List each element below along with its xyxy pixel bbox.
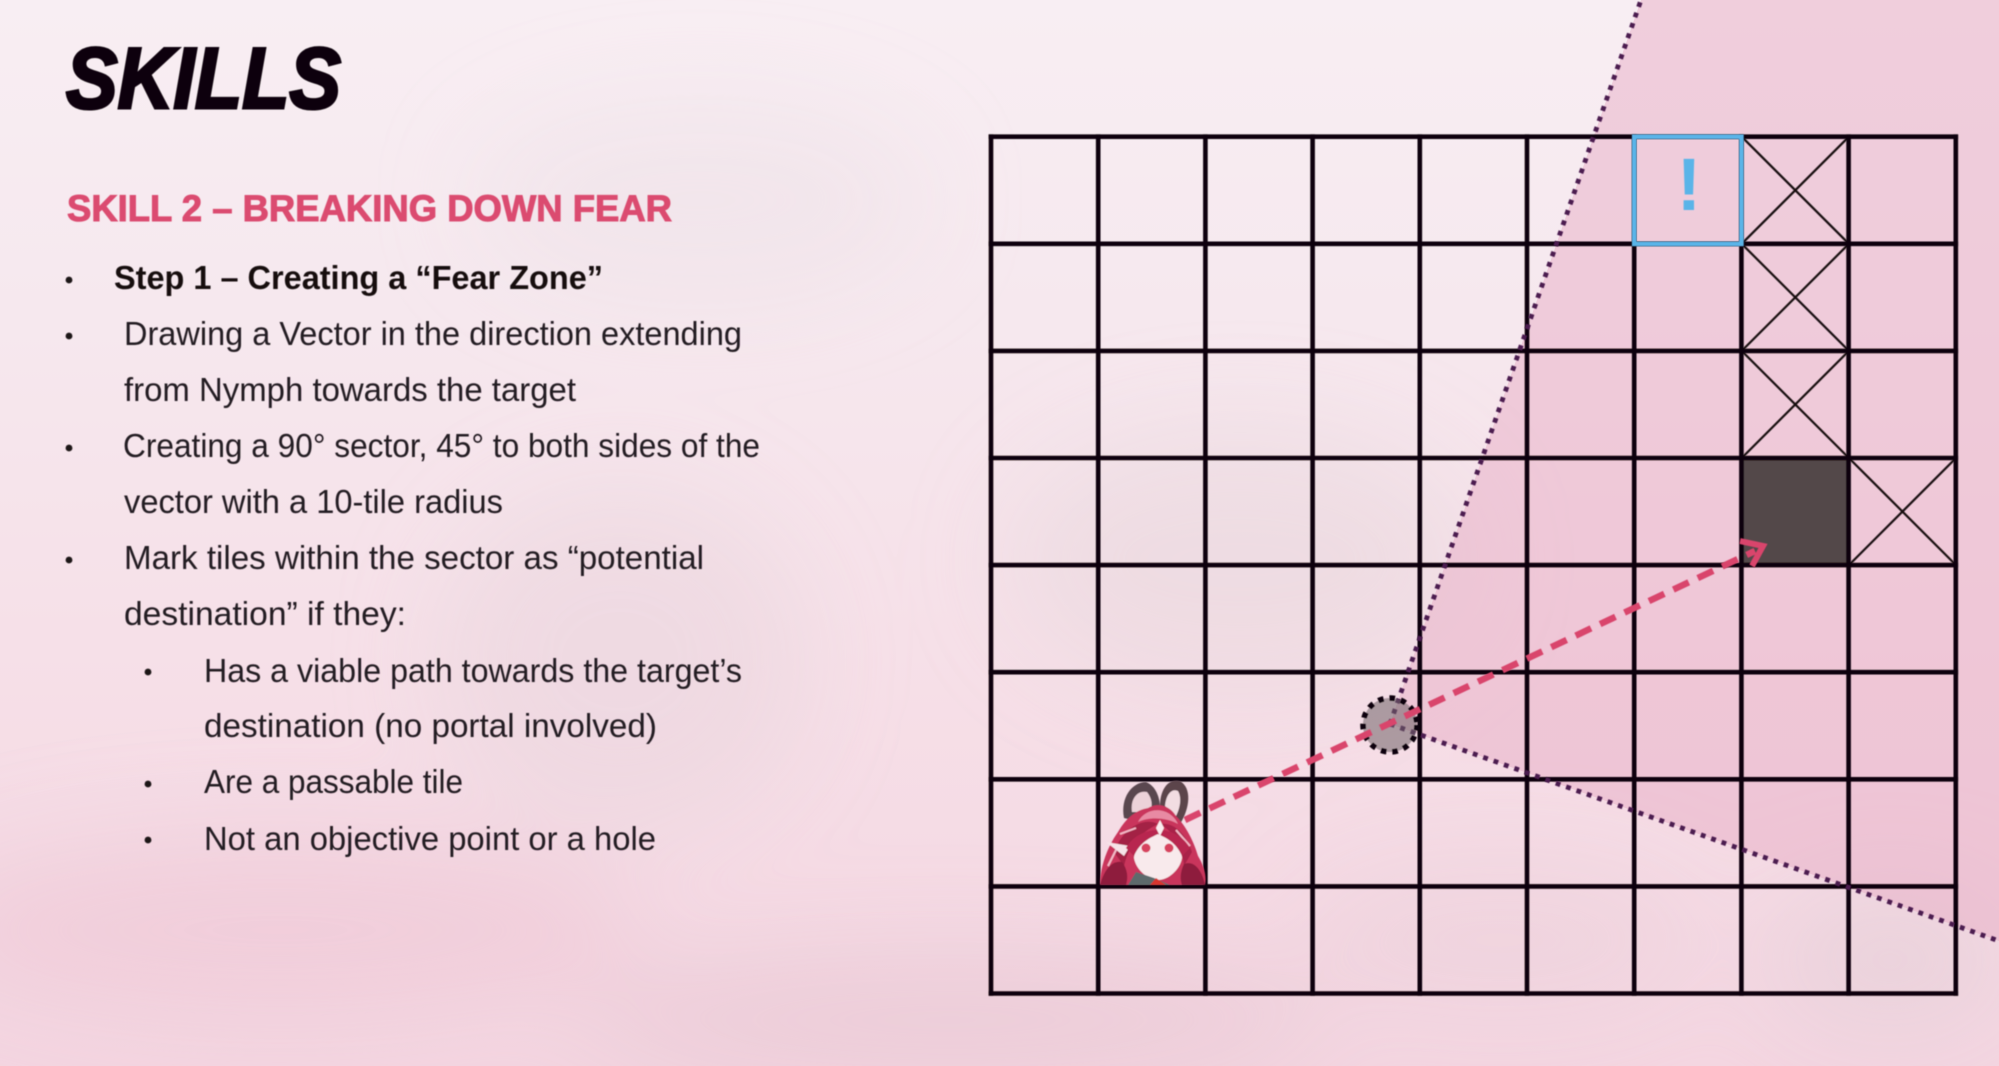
hair ornament (1156, 820, 1164, 836)
text block: step 1 bullet list (66, 259, 760, 857)
sub-item: not objective: Not an objective point or a hole (204, 820, 656, 857)
face (1134, 834, 1182, 880)
character portrait: Nymph (1100, 781, 1206, 885)
hair (1100, 805, 1206, 885)
dark blocked tile (1742, 458, 1849, 565)
collar (1128, 872, 1170, 885)
sector: fear zone fill (1390, 0, 1999, 941)
list item: mark tiles: Mark tiles within the sector as “potential (124, 539, 704, 576)
sub-item continuation: destination (no portal involved) (204, 707, 657, 744)
bullets (66, 277, 151, 843)
heading: skill name: SKILL 2 – BREAKING DOWN FEAR (67, 188, 672, 229)
elf ear (1106, 842, 1130, 856)
arrow: vector from Nymph to target (1185, 541, 1763, 820)
marker: sector origin (1363, 698, 1417, 752)
list item continuation: from Nymph towards the target (124, 371, 576, 408)
eyes (1142, 844, 1150, 852)
sub-item: passable tile: Are a passable tile (204, 763, 463, 800)
list item: drawing a vector: Drawing a Vector in the direction extending (124, 315, 742, 352)
step heading: Step 1 – Creating a “Fear Zone” (114, 259, 603, 296)
list item continuation: destination” if they: (124, 595, 406, 632)
crossed-out tiles (1742, 137, 1956, 565)
highlighted tile: warning (1634, 137, 1741, 244)
bangs (1126, 830, 1190, 856)
sub-item: viable path: Has a viable path towards the target’s (204, 652, 742, 689)
tile grid (991, 137, 1956, 993)
list item continuation: vector with a 10-tile radius (124, 483, 503, 520)
icon: exclamation mark: ! (1677, 143, 1701, 226)
list item: creating a sector: Creating a 90° sector, 45° to both sides of the (123, 427, 760, 464)
ears (1123, 782, 1160, 822)
sector boundary lines (1390, 0, 1999, 941)
title: SKILLS (66, 31, 341, 127)
